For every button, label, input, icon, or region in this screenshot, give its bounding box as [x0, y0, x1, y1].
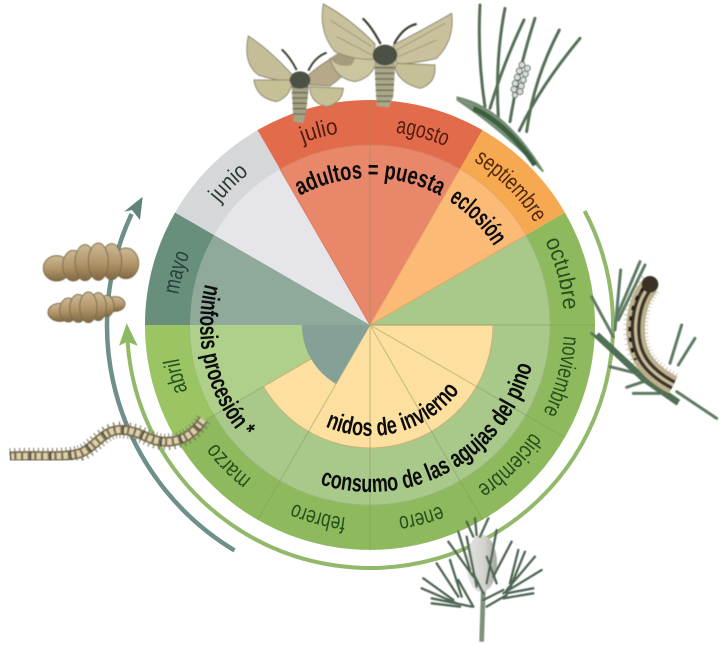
month labels: febrero: [291, 504, 344, 534]
sector dividers: [175, 100, 595, 550]
icon: small pupa: [48, 292, 125, 323]
label: eclosión: eclosión: [450, 192, 504, 246]
month labels: junio: [207, 166, 246, 206]
icon: large moth: [322, 4, 452, 107]
month labels: agosto: [396, 121, 448, 145]
icon: small moth: [247, 36, 357, 123]
icon: egg batch: [511, 62, 530, 98]
label: consumo de las agujas del pino: consumo de las agujas del pino: [322, 364, 532, 492]
month labels: enero: [400, 506, 443, 528]
icon: large pupa: [43, 243, 139, 281]
icon: procession larva: [10, 419, 203, 457]
month labels: mayo: [166, 252, 189, 294]
month labels: octubre: [546, 238, 576, 309]
month labels: noviembre: [544, 337, 576, 416]
inner ring: activity sectors: [190, 145, 550, 505]
outer ring: month sectors: [145, 100, 595, 550]
month labels: [162, 120, 576, 534]
panel: calendar wheel: [145, 100, 595, 550]
icon: adult moths: [247, 4, 452, 123]
arrow: teal pupation arc: [107, 197, 234, 550]
month labels: julio: [298, 120, 337, 148]
month labels: diciembre: [479, 434, 542, 495]
icon: larva on pine twig: [592, 262, 717, 418]
icon: pupae: [43, 243, 139, 323]
sector: winter nests: [264, 325, 493, 448]
month labels: abril: [162, 359, 187, 393]
month labels: septiembre: [475, 152, 544, 221]
label: nidos de invierno: nidos de invierno: [326, 384, 458, 436]
label: adultos = puesta: adultos = puesta: [296, 164, 444, 196]
icon: pine twig with winter nest: [422, 518, 542, 642]
label: ninfosis procesión: ninfosis procesión *: [198, 285, 255, 432]
month labels: marzo: [208, 445, 250, 488]
sector: pupation in soil: [302, 325, 370, 384]
icon: pine branch with egg batch: [457, 5, 580, 172]
arrow: green larval arc: [119, 211, 613, 568]
